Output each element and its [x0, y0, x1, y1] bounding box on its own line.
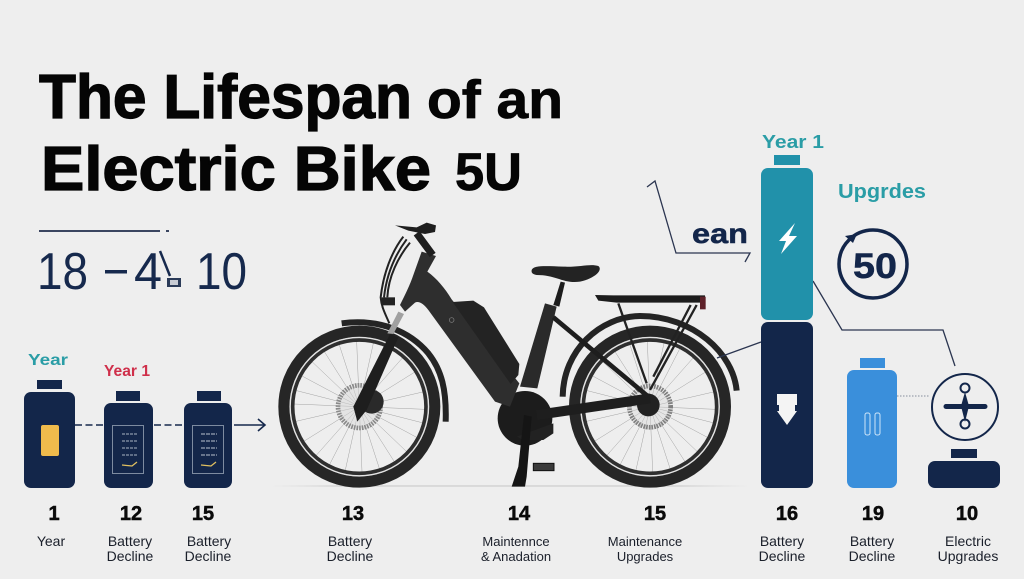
title: Electric Bike [41, 135, 431, 204]
battery 2: Year 1 [104, 363, 153, 488]
electric bike illustration [270, 223, 750, 487]
timeline labels: Upgrades [617, 549, 674, 564]
badge: 50: 50 [853, 247, 897, 286]
timeline labels: Year [37, 533, 65, 549]
subtitle range: 18 - 4 10: 18 [37, 243, 88, 301]
icon: down arrow [777, 394, 797, 425]
battery 1: Year [24, 352, 75, 488]
timeline labels: Electric [945, 533, 991, 549]
icon: lightning bolt [779, 223, 797, 254]
title: of an [427, 70, 563, 130]
timeline labels [37, 533, 998, 564]
rear fender [563, 316, 737, 397]
timeline numbers: 13 [342, 503, 364, 525]
tall navy battery [761, 322, 813, 488]
motor [498, 391, 552, 446]
circle tool icon [932, 374, 998, 440]
subtitle range: 18 - 4 10: 4 [134, 243, 162, 301]
icon: two pills [865, 413, 880, 435]
battery pack [453, 301, 519, 384]
timeline numbers [48, 503, 978, 525]
timeline labels: Battery [850, 533, 894, 549]
timeline numbers: 12 [120, 503, 142, 525]
timeline dashed connector with arrow [75, 419, 265, 431]
timeline numbers: 15 [192, 503, 214, 525]
timeline labels: Decline [759, 548, 806, 564]
timeline labels: Upgrades [938, 548, 998, 564]
timeline numbers: 1 [48, 503, 60, 525]
timeline labels: Decline [849, 548, 896, 564]
rear rack [595, 295, 705, 303]
timeline numbers: 14 [508, 503, 531, 525]
timeline labels: Battery [108, 533, 152, 549]
timeline labels: Battery [760, 533, 804, 549]
callout: ean: ean [692, 218, 748, 249]
callout leader lines [647, 181, 955, 396]
timeline labels: Decline [185, 548, 232, 564]
subtitle range: 18 - 4 10 [37, 230, 247, 301]
title: The Lifespan [39, 63, 412, 132]
tall teal battery [761, 155, 813, 320]
timeline labels: Battery [187, 533, 231, 549]
timeline labels: Maintennce [482, 534, 550, 549]
title [39, 63, 563, 204]
kickstand and pedal [512, 415, 532, 487]
subtitle range: 18 - 4 10: 10 [196, 243, 247, 301]
timeline numbers: 19 [862, 503, 884, 525]
saddle [532, 265, 600, 282]
timeline labels: Battery [328, 533, 372, 549]
seat tube [520, 303, 557, 388]
handlebar [395, 223, 436, 234]
timeline numbers: 15 [644, 503, 666, 525]
timeline labels: & Anadation [481, 549, 551, 564]
timeline numbers: 10 [956, 503, 978, 525]
fork [353, 334, 398, 422]
battery 2: Year 1: Year 1 [104, 363, 150, 380]
blue battery [847, 358, 897, 488]
title: 5U [455, 143, 522, 202]
timeline labels: Decline [107, 548, 154, 564]
cables [381, 237, 410, 323]
main frame [400, 252, 519, 407]
label: Year 1 teal: Year 1 [762, 132, 824, 152]
timeline labels: Decline [327, 548, 374, 564]
label: Upgrdes: Upgrdes [838, 181, 926, 203]
battery 1: Year: Year [28, 352, 68, 369]
battery 3 [184, 391, 232, 488]
timeline labels: Maintenance [608, 534, 682, 549]
badge: 50 [839, 230, 907, 298]
front fender [342, 322, 446, 422]
small flat battery [928, 449, 1000, 488]
chainstay and seatstay [537, 398, 650, 415]
timeline numbers: 16 [776, 503, 798, 525]
brake discs [338, 385, 381, 428]
